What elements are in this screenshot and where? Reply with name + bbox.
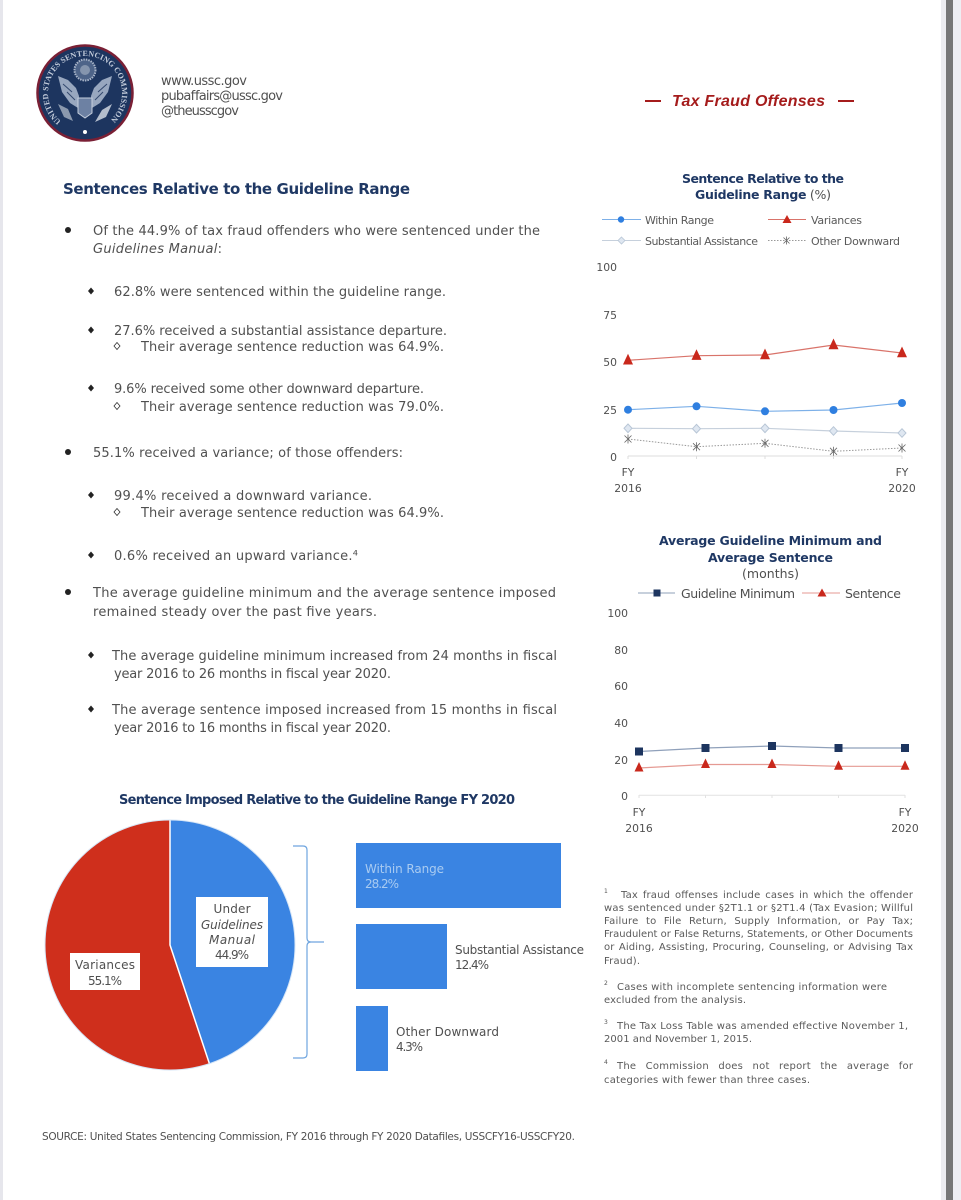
text block: footnotes: excluded from the analysis. (604, 995, 746, 1006)
text block: sentencing bullets: 9.6% received some other downward departure. (114, 382, 424, 397)
text block: footnotes: 4 (604, 1059, 608, 1066)
text block: sentencing bullets: Their average sentence reduction was 79.0%. (140, 400, 444, 415)
line chart: sentence relative to the guideline range: 50 (603, 356, 617, 369)
line chart: sentence relative to the guideline range: Guideline Range (%) (695, 187, 831, 202)
bar: within range: Within Range (365, 862, 444, 876)
bracket: breakdown of under guidelines manual (293, 846, 324, 1058)
text block: sentencing bullets: The average guideline minimum and the average sentence imposed (92, 586, 556, 601)
line chart: sentence relative to the guideline range: Sentence Relative to the (682, 171, 844, 186)
heading: sentence imposed relative to the guideline range FY 2020: Sentence Imposed Relative to the Guideline Range FY 2020 (119, 793, 515, 808)
text block: sentencing bullets: year 2016 to 16 months in fiscal year 2020. (114, 721, 391, 736)
pie label: variances: 55.1% (88, 974, 122, 988)
bar: other downward (356, 1006, 499, 1071)
text block: footnotes: Cases with incomplete sentencing information were (617, 982, 887, 993)
text block: footnotes: 1 (604, 888, 608, 895)
contact details: pubaffairs@ussc.gov (161, 89, 283, 104)
line chart: average guideline minimum and average sentence: (months) (742, 566, 799, 581)
pie label: under guidelines manual: Under (214, 902, 251, 916)
text block: sentencing bullets: Their average sentence reduction was 64.9%. (140, 506, 444, 521)
source line: SOURCE: United States Sentencing Commission, FY 2016 through FY 2020 Datafiles, USSCFY16-USSCFY20. (42, 1131, 575, 1143)
text block: sentencing bullets: Guidelines Manual: (93, 242, 222, 257)
bar: substantial assistance: 12.4% (455, 958, 489, 972)
pie label: variances: Variances (75, 958, 135, 972)
text block: sentencing bullets: remained steady over the past five years. (93, 605, 377, 620)
line chart: sentence relative to the guideline range: 2020 (888, 482, 916, 495)
line chart: sentence relative to the guideline range: 0 (610, 451, 617, 464)
line chart: average guideline minimum and average sentence: FY (899, 806, 912, 819)
pie label: under guidelines manual (196, 897, 268, 967)
line chart: sentence relative to the guideline range: FY (896, 466, 909, 479)
bar: other downward: Other Downward (396, 1025, 499, 1039)
text block: footnotes: Tax fraud offenses include cases in which the offender (620, 890, 914, 901)
text block: sentencing bullets: Their average sentence reduction was 64.9%. (140, 340, 444, 355)
title: Tax Fraud Offenses: Tax Fraud Offenses (672, 93, 825, 110)
line chart: sentence relative to the guideline range: Substantial Assistance (645, 235, 758, 248)
text block: footnotes: categories with fewer than three cases. (604, 1075, 810, 1086)
line chart: sentence relative to the guideline range: FY (622, 466, 635, 479)
line chart: sentence relative to the guideline range: 2016 (614, 482, 642, 495)
text block: footnotes: Failure to File Return, Supply Information, or Pay Tax; (604, 916, 913, 927)
text block: footnotes (604, 888, 914, 1086)
text block: sentencing bullets: The average guideline minimum increased from 24 months in fiscal (111, 649, 557, 664)
text block: sentencing bullets: year 2016 to 26 months in fiscal year 2020. (114, 667, 391, 682)
text block: sentencing bullets: The average sentence imposed increased from 15 months in fiscal (111, 703, 557, 718)
text block: footnotes: Fraud). (604, 956, 640, 967)
line chart: average guideline minimum and average sentence: Average Sentence (708, 550, 833, 565)
contact details: @theusscgov (161, 104, 239, 119)
line chart: average guideline minimum and average sentence: 100 (607, 607, 628, 620)
text block: sentencing bullets: Of the 44.9% of tax fraud offenders who were sentenced under the (93, 224, 540, 239)
text block: footnotes: The Commission does not report the average for (616, 1061, 914, 1072)
line chart: average guideline minimum and average sentence: Average Guideline Minimum and (659, 533, 882, 548)
pie chart: variances and under guidelines manual (45, 820, 295, 1070)
bar: within range: 28.2% (365, 877, 399, 891)
text block: footnotes: 2 (604, 980, 608, 987)
text block: footnotes: 3 (604, 1019, 608, 1026)
pie label: under guidelines manual: 44.9% (215, 948, 249, 962)
line chart: average guideline minimum and average sentence: 40 (614, 717, 628, 730)
line chart: average guideline minimum and average sentence: Sentence (845, 586, 901, 601)
line chart: sentence relative to the guideline range (596, 171, 916, 495)
text block: sentencing bullets: 62.8% were sentenced within the guideline range. (114, 285, 446, 300)
line chart: average guideline minimum and average sentence: 2020 (891, 822, 919, 835)
text block: sentencing bullets: 0.6% received an upward variance.⁴ (114, 549, 358, 564)
pie label: variances (70, 953, 140, 990)
text block: footnotes: was sentenced under §2T1.1 or §2T1.4 (Tax Evasion; Willful (604, 903, 913, 914)
text block: sentencing bullets: 27.6% received a substantial assistance departure. (114, 324, 447, 339)
text block: footnotes: 2001 and November 1, 2015. (604, 1034, 752, 1045)
bar: substantial assistance: Substantial Assistance (455, 943, 584, 957)
line chart: average guideline minimum and average sentence: 60 (614, 680, 628, 693)
line chart: sentence relative to the guideline range: Within Range (645, 214, 714, 227)
text block: footnotes: Fraudulent or False Returns, Statements, or Other Documents (604, 929, 913, 940)
line chart: average guideline minimum and average sentence: 0 (621, 790, 628, 803)
line chart: average guideline minimum and average sentence: FY (633, 806, 646, 819)
line chart: average guideline minimum and average sentence: 2016 (625, 822, 653, 835)
bar: substantial assistance (356, 924, 584, 989)
bar: within range (356, 843, 561, 908)
line chart: sentence relative to the guideline range: Other Downward (811, 235, 900, 248)
line chart: sentence relative to the guideline range: Variances (811, 214, 862, 227)
line chart: sentence relative to the guideline range: 25 (603, 404, 617, 417)
text block: sentencing bullets: 99.4% received a downward variance. (114, 489, 372, 504)
heading: Sentences Relative to the Guideline Range: Sentences Relative to the Guideline Range (63, 180, 410, 198)
line chart: sentence relative to the guideline range: 100 (596, 261, 617, 274)
line chart: average guideline minimum and average sentence (607, 533, 919, 835)
text block: footnotes: The Tax Loss Table was amended effective November 1, (616, 1021, 908, 1032)
bar: other downward: 4.3% (396, 1040, 423, 1054)
text block: sentencing bullets: 55.1% received a variance; of those offenders: (93, 446, 403, 461)
text block: sentencing bullets (65, 224, 557, 736)
icon: commission seal: UNITED STATES SENTENCING COMMISSION (42, 50, 128, 125)
pie label: under guidelines manual: Manual (209, 933, 256, 947)
text block: footnotes: or Aiding, Assisting, Procuring, Counseling, or Advising Tax (604, 942, 913, 953)
line chart: average guideline minimum and average sentence: 20 (614, 754, 628, 767)
contact details (161, 74, 283, 119)
contact details: www.ussc.gov (161, 74, 247, 89)
line chart: average guideline minimum and average sentence: 80 (614, 644, 628, 657)
pie label: under guidelines manual: Guidelines (201, 918, 263, 932)
line chart: average guideline minimum and average sentence: Guideline Minimum (681, 586, 795, 601)
line chart: sentence relative to the guideline range: 75 (603, 309, 617, 322)
